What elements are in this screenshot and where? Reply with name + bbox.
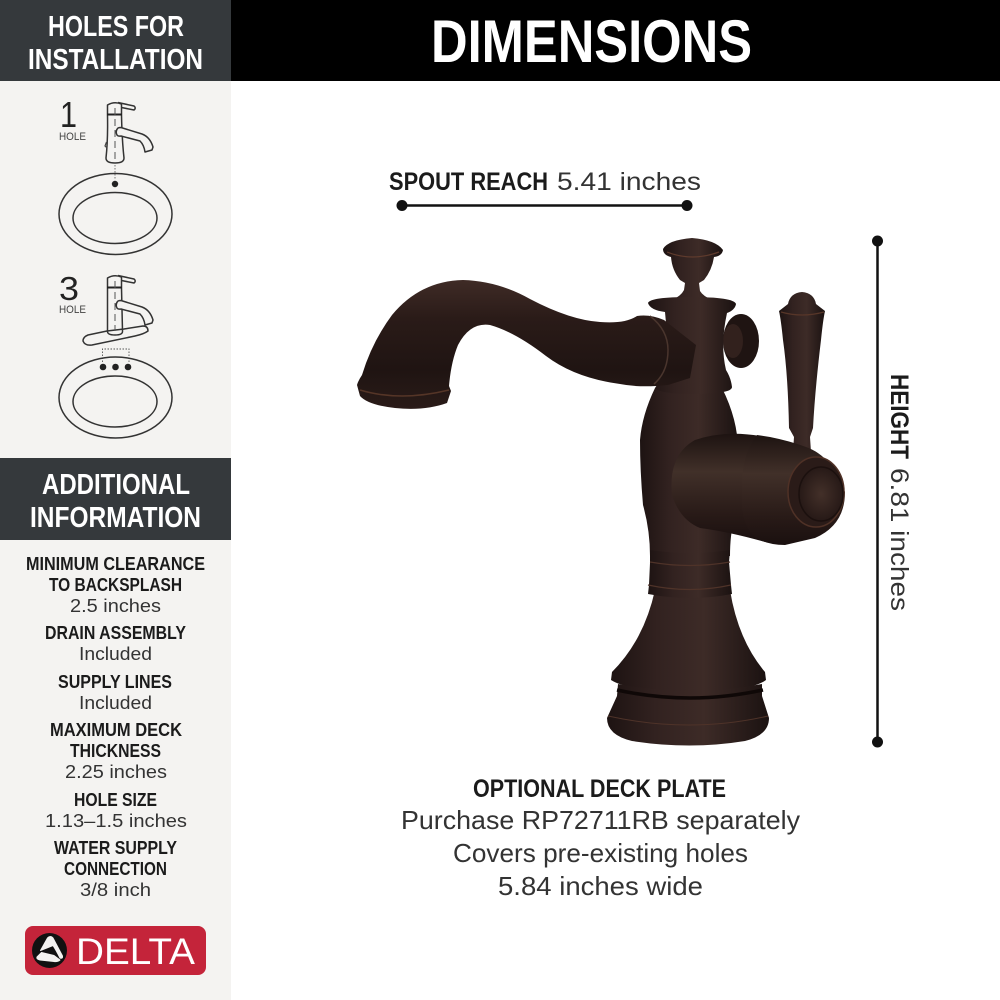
logo: Delta: DELTA (76, 931, 195, 972)
top knob (663, 238, 723, 300)
text block: additional information list: DRAIN ASSEMBLY (45, 623, 186, 643)
left sidebar panel (0, 0, 231, 1000)
heading: additional information: ADDITIONAL (42, 469, 190, 501)
back knob (723, 314, 759, 368)
ring band (648, 550, 732, 598)
text block: optional deck plate (401, 775, 800, 901)
text block: additional information list: SUPPLY LINES (58, 672, 172, 692)
heading: holes for installation: HOLES FOR (48, 11, 184, 43)
spout collar (650, 316, 668, 384)
text block: additional information list: THICKNESS (70, 741, 161, 761)
text block: additional information list: MAXIMUM DECK (50, 720, 182, 740)
text block: optional deck plate: Purchase RP72711RB separately (401, 805, 800, 835)
text block: additional information list: Included (79, 644, 152, 664)
heading: additional information: INFORMATION (30, 502, 201, 534)
label: height: 6.81 inches (885, 468, 913, 611)
label: spout reach (389, 168, 701, 196)
faucet product illustration (357, 238, 845, 746)
text block: additional information list: HOLE SIZE (74, 790, 157, 810)
text block: optional deck plate: Covers pre-existing holes (453, 838, 748, 868)
heading: holes for installation: INSTALLATION (28, 44, 203, 76)
hub cap rings (788, 457, 844, 527)
handle arm (671, 434, 765, 542)
spout lip highlight (360, 390, 449, 396)
lever handle (779, 292, 825, 452)
icon: three hole installation: HOLE (59, 304, 86, 316)
heading: dimensions (231, 0, 1000, 81)
heading: additional information (0, 458, 231, 540)
text block: additional information list: MINIMUM CLEARANCE (26, 554, 205, 574)
arrow: height dimension line (872, 236, 883, 748)
icon: one hole installation: 1 (60, 94, 77, 135)
text block: additional information list: TO BACKSPLASH (49, 575, 182, 595)
text block: optional deck plate: 5.84 inches wide (498, 871, 703, 901)
main body (640, 388, 738, 556)
base plate (607, 684, 769, 746)
label: height: HEIGHT (885, 374, 913, 459)
label: spout reach: SPOUT REACH (389, 168, 548, 196)
spout (357, 280, 696, 409)
text block: additional information list: CONNECTION (64, 859, 167, 879)
text block: additional information list: 2.25 inches (65, 762, 167, 782)
text block: additional information list (26, 554, 205, 900)
hub cylinder (742, 435, 845, 545)
label: height (885, 374, 913, 611)
text block: optional deck plate: OPTIONAL DECK PLATE (473, 775, 726, 803)
text block: additional information list: 3/8 inch (80, 880, 151, 900)
text block: additional information list: 2.5 inches (70, 596, 161, 616)
heading: holes for installation (0, 0, 231, 81)
text block: additional information list: WATER SUPPLY (54, 838, 177, 858)
icon: three hole installation: 3 (59, 270, 79, 307)
icon: three hole installation (59, 270, 172, 438)
cone base (611, 590, 766, 692)
arrow: spout reach dimension line (396, 200, 692, 211)
label: spout reach: 5.41 inches (557, 168, 701, 196)
text block: additional information list: Included (79, 693, 152, 713)
icon: one hole installation (59, 94, 172, 254)
neck and top collar (648, 297, 736, 394)
icon: one hole installation: HOLE (59, 131, 86, 143)
heading: dimensions: DIMENSIONS (431, 8, 752, 75)
logo: Delta (25, 926, 206, 975)
text block: additional information list: 1.13–1.5 inches (45, 811, 187, 831)
